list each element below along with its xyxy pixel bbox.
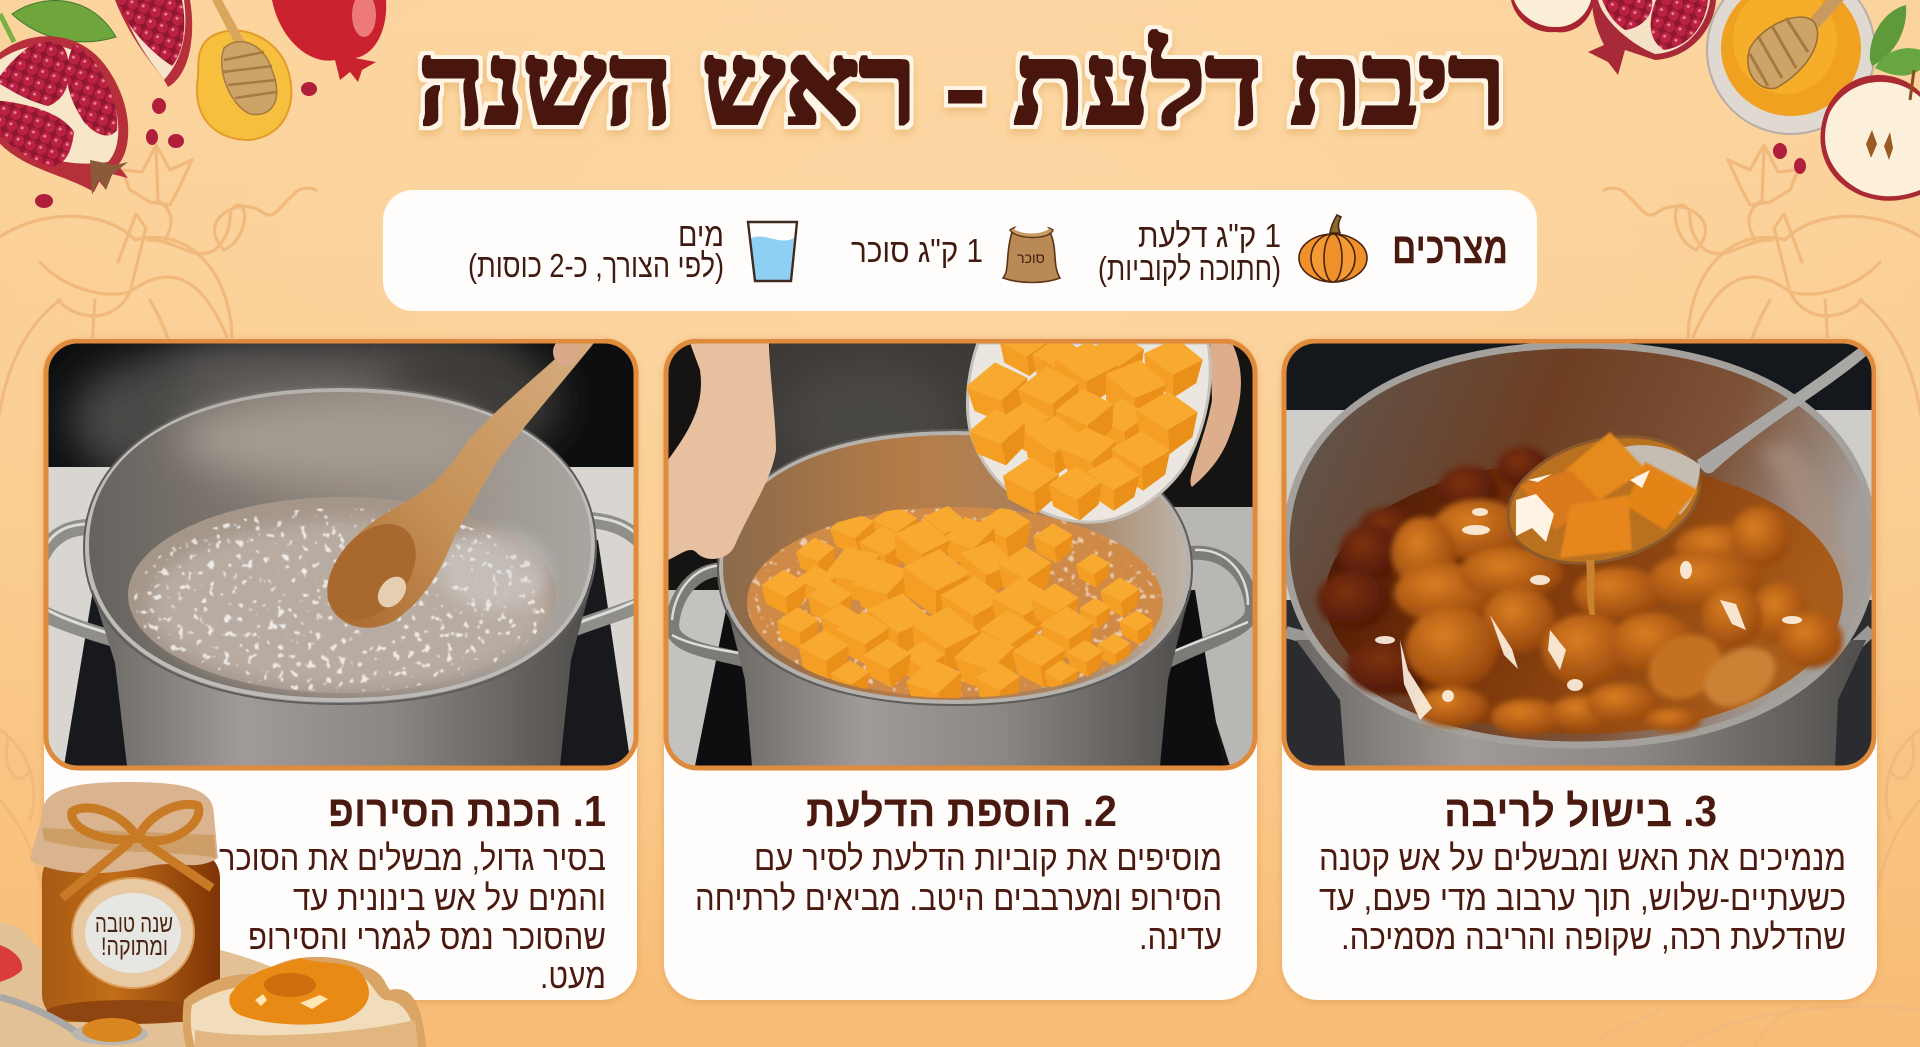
step 1 text: שהסוכר נמס לגמרי והסירופ — [248, 918, 606, 957]
icon: apple slice on board — [0, 945, 22, 982]
step 1 text: בסיר גדול, מבשלים את הסוכר — [219, 839, 606, 878]
step 2 text: הסירופ ומערבבים היטב. מביאים לרתיחה — [695, 879, 1222, 918]
step 1 text — [219, 839, 606, 996]
icon: glass of water — [748, 222, 797, 281]
step 1 heading: 1. הכנת הסירופ — [328, 787, 606, 836]
left hand — [668, 343, 776, 560]
jar label: שנה טובה — [95, 910, 173, 938]
ingredients heading: מצרכים — [1392, 224, 1508, 273]
step 3 text: שהדלעת רכה, שקופה והריבה מסמיכה. — [1341, 918, 1846, 957]
ingredient: pumpkin text: 1 ק"ג דלעת — [1138, 217, 1281, 254]
step 3 text — [1319, 839, 1846, 957]
photo frame — [666, 341, 1255, 768]
jar label: ומתוקה! — [101, 933, 168, 961]
pumpkin cubes in bowl — [966, 344, 1203, 520]
bottom left scene: wooden board — [0, 923, 420, 1047]
step 1 text: מעט. — [540, 957, 606, 996]
title: ריבת דלעת - ראש השנה — [418, 24, 1506, 148]
panel: step 2 pumpkin — [664, 325, 1257, 1000]
icon: leaf — [0, 0, 116, 42]
step 2 heading: 2. הוספת הדלעת — [806, 787, 1117, 836]
ingredient: pumpkin text — [1098, 217, 1281, 287]
photo frame — [1284, 341, 1874, 768]
glossy highlights — [1375, 508, 1802, 720]
ingredient: water text: (לפי הצורך, כ-2 כוסות) — [468, 247, 724, 284]
icon: leaves — [1870, 5, 1920, 76]
panel: ingredients — [383, 190, 1537, 311]
step 1 text: והמים על אש בינונית עד — [293, 879, 606, 918]
spoon with jam — [0, 997, 148, 1045]
photo: cooking jam — [1286, 343, 1874, 770]
ingredient: sugar text: 1 ק"ג סוכר — [851, 232, 983, 269]
photo: adding pumpkin cubes — [668, 325, 1254, 766]
icon: pomegranate slice — [115, 0, 192, 87]
photo: boiling syrup pot — [40, 337, 645, 767]
ingredient: water text: מים — [678, 216, 724, 253]
panel: step 1 syrup — [40, 337, 645, 1000]
step 2 text: מוסיפים את קוביות הדלעת לסיר עם — [754, 839, 1222, 878]
icon: sugar sack: סוכר — [1017, 250, 1045, 266]
serving spoon — [1494, 347, 1866, 615]
seeds — [35, 82, 317, 208]
step 2 text: עדינה. — [1139, 918, 1222, 957]
ingredient: water text — [468, 216, 724, 284]
step 2 text — [695, 839, 1222, 957]
seeds — [1773, 143, 1806, 174]
right hand — [1191, 343, 1241, 487]
icon: honey bowl — [1707, 0, 1875, 134]
step 3 heading: 3. בישול לריבה — [1444, 787, 1717, 836]
background pumpkin line art right — [1600, 145, 1920, 1047]
icon: halved apple — [1820, 70, 1920, 201]
icon: pumpkin — [1299, 215, 1367, 282]
jar cloth lid — [30, 782, 218, 873]
bowl of pumpkin — [967, 343, 1210, 522]
jam jar with label — [30, 782, 220, 1024]
jar label — [72, 878, 194, 988]
step 3 text: כשעתיים-שלוש, תוך ערבוב מדי פעם, עד — [1319, 879, 1846, 918]
background pumpkin line art left — [0, 145, 316, 900]
wooden spoon — [327, 344, 594, 628]
jam chunks — [1317, 447, 1843, 735]
ingredient: pumpkin text: (חתוכה לקוביות) — [1098, 250, 1281, 287]
icon: apple top — [1511, 0, 1594, 32]
icon: pomegranate half right — [1588, 0, 1716, 75]
icon: whole pomegranate — [272, 0, 386, 82]
top right decoration: apples, pomegranate and honey bowl — [1511, 0, 1920, 201]
jar bow — [62, 804, 212, 898]
top left decoration: pomegranates and honey — [0, 0, 386, 208]
icon: honey puddle with dipper — [197, 0, 291, 140]
step 3 text: מנמיכים את האש ומבשלים על אש קטנה — [1319, 839, 1846, 878]
photo frame — [46, 341, 636, 768]
icon: sugar sack — [1003, 215, 1060, 282]
icon: halved pomegranate — [0, 36, 128, 195]
pumpkin cubes in pot — [762, 506, 1153, 698]
bread slice with jam — [183, 957, 426, 1047]
panel: step 3 jam — [1282, 338, 1877, 1000]
